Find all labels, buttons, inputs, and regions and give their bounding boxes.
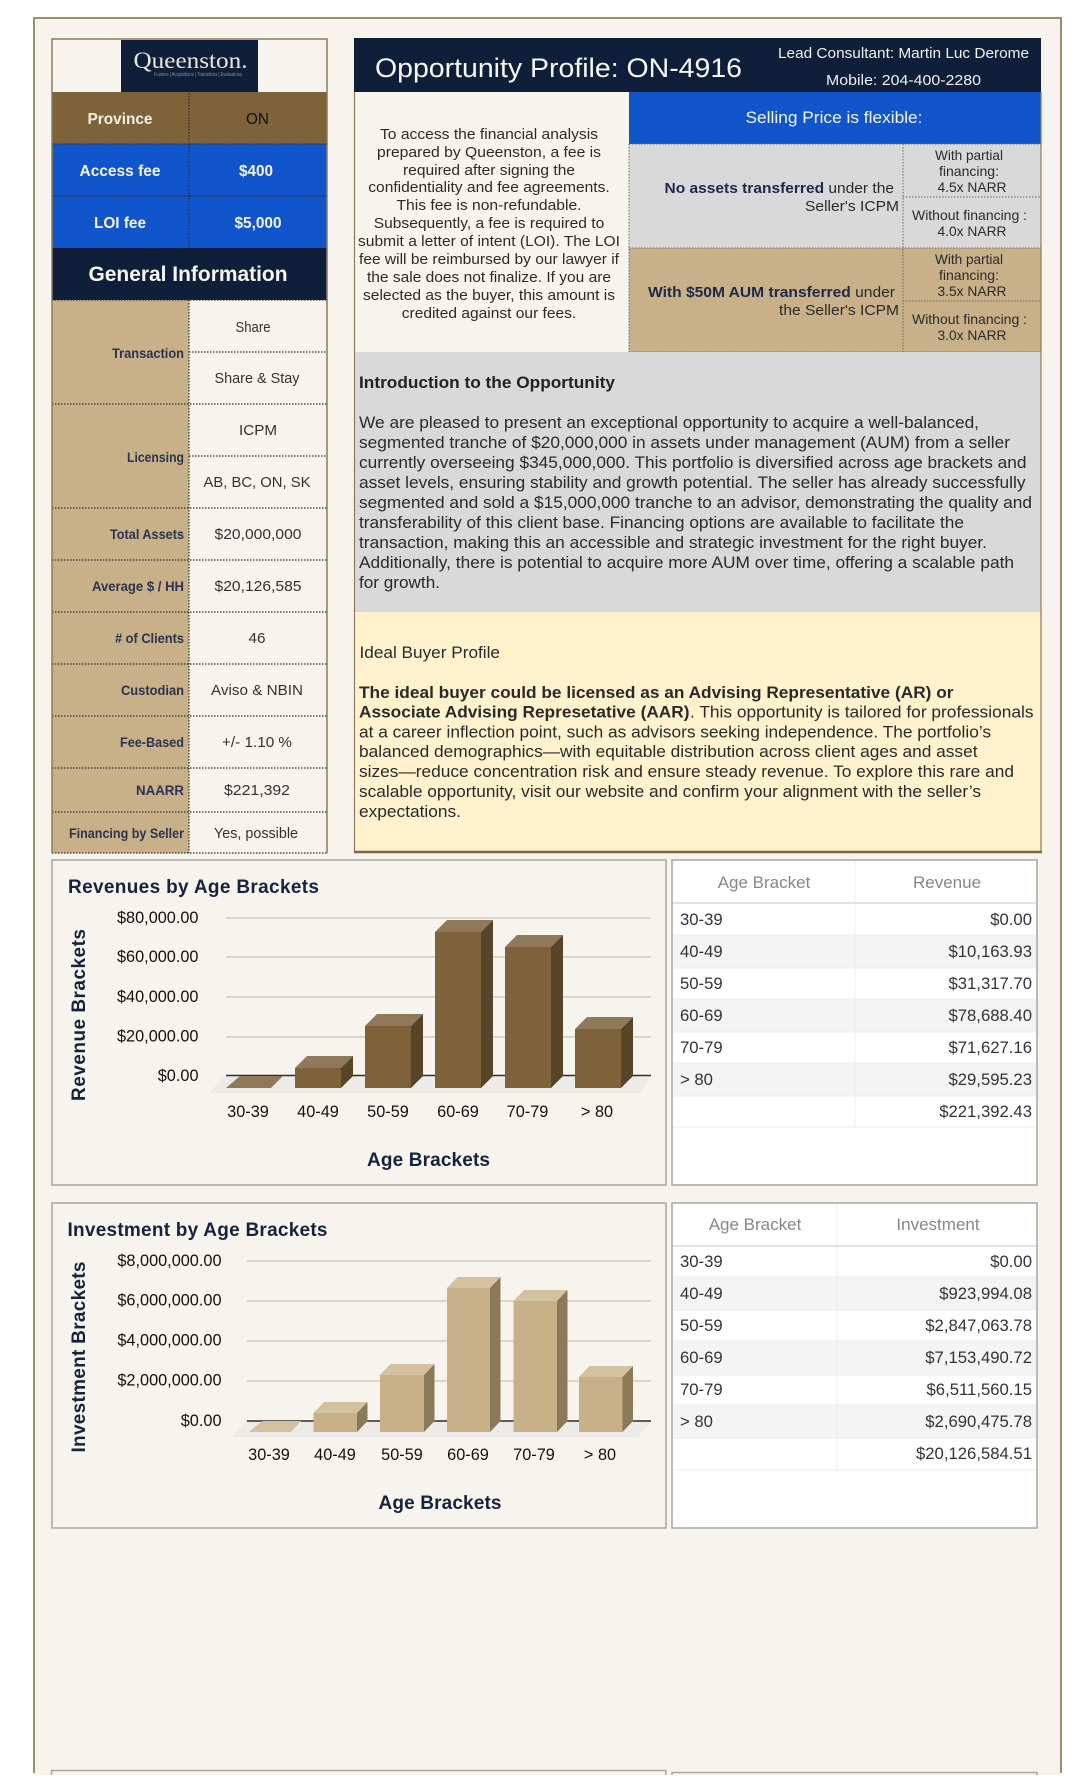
row labels: [69, 346, 185, 841]
table: revenue by age bracket: $0.00: [990, 910, 1032, 929]
row labels: # of Clients: [115, 631, 184, 646]
x axis labels: 70-79: [513, 1446, 555, 1464]
pricing: no assets transferred: 4.0x NARR: [938, 223, 1006, 239]
table: investment by age bracket: 40-49: [680, 1284, 723, 1303]
text block: introduction: currently overseeing $345,000,000. This portfolio is diversified across age brackets and: [359, 454, 1026, 472]
row: province: [52, 92, 327, 144]
x axis labels: 50-59: [381, 1446, 423, 1464]
text block: fee explanation: submit a letter of intent (LOI). The LOI: [358, 233, 620, 250]
text block: ideal buyer profile: at a career inflection point, such as advisors seeking independence. The portfolio’s: [359, 724, 991, 742]
pricing: no assets transferred: Without financing :: [912, 207, 1027, 223]
y axis labels: $80,000.00: [117, 909, 198, 927]
heading: general information: [52, 248, 327, 300]
x axis labels: 30-39: [227, 1103, 269, 1121]
row values: +/- 1.10 %: [222, 734, 292, 751]
row labels: Custodian: [121, 683, 184, 698]
text block: ideal buyer profile: The ideal buyer could be licensed as an Advising Representative (AR) or: [359, 684, 954, 702]
row: access fee: $400: [239, 163, 273, 180]
y axis labels: [117, 909, 198, 1085]
text block: introduction: Additionally, there is potential to acquire more AUM over time, offering a scalable path: [359, 554, 1014, 572]
y axis title: Revenue Brackets: [69, 929, 90, 1101]
table: revenue by age bracket: $31,317.70: [948, 974, 1032, 993]
table: revenue by age bracket: > 80: [680, 1070, 713, 1089]
header: opportunity profile: Opportunity Profile: ON-4916: [375, 53, 742, 83]
text block: fee explanation: This fee is non-refundable.: [396, 197, 582, 214]
y axis labels: $4,000,000.00: [117, 1332, 222, 1350]
pricing: with $50M AUM transferred: 3.0x NARR: [938, 327, 1006, 343]
row values: 46: [248, 630, 266, 647]
table: investment by age bracket: $2,690,475.78: [925, 1412, 1032, 1431]
x axis labels: 40-49: [297, 1103, 339, 1121]
y axis labels: $6,000,000.00: [117, 1292, 222, 1310]
table: revenue by age bracket: Age Bracket: [718, 873, 811, 892]
x axis labels: > 80: [584, 1446, 616, 1464]
pricing: with $50M AUM transferred: 3.5x NARR: [938, 283, 1006, 299]
pricing: no assets transferred: With partial: [935, 147, 1003, 163]
table: investment by age bracket: $6,511,560.15: [927, 1380, 1032, 1399]
table: investment by age bracket: $0.00: [990, 1252, 1032, 1271]
text block: introduction: for growth.: [359, 574, 440, 592]
header: opportunity profile: Mobile: 204-400-2280: [826, 72, 981, 89]
text block: ideal buyer profile: sizes—reduce concentration risk and ensure steady revenue. To explore this rare and: [359, 763, 1014, 781]
logo: Queenston: Queenston.: [134, 48, 248, 74]
text block: ideal buyer profile: Associate Advising Represetative (AAR): [359, 704, 690, 722]
table: revenue by age bracket: $221,392.43: [939, 1102, 1032, 1121]
text block: ideal buyer profile: Ideal Buyer Profile: [360, 644, 500, 662]
x axis labels: 60-69: [447, 1446, 489, 1464]
x axis labels: [248, 1446, 616, 1464]
table: revenue by age bracket: $10,163.93: [948, 942, 1032, 961]
text block: fee explanation: Subsequently, a fee is required to: [374, 215, 604, 232]
text block: fee explanation: [354, 92, 629, 352]
row: LOI fee: [52, 196, 327, 248]
table: investment by age bracket: Investment: [896, 1215, 980, 1234]
heading: general information: General Information: [88, 262, 288, 286]
row: access fee: Access fee: [80, 163, 161, 180]
table: revenue by age bracket: 50-59: [680, 974, 723, 993]
row values: Aviso & NBIN: [211, 682, 303, 699]
panel: left summary column: [52, 39, 327, 853]
row labels: Financing by Seller: [69, 826, 185, 841]
table: revenue by age bracket: Revenue: [913, 873, 981, 892]
table: revenue by age bracket: [672, 860, 1037, 1185]
text block: fee explanation: credited against our fees.: [402, 305, 576, 322]
table: investment by age bracket: Age Bracket: [709, 1215, 802, 1234]
table: investment by age bracket: [672, 1203, 1037, 1528]
banner: selling price: Selling Price is flexible:: [746, 109, 922, 127]
row labels: Licensing: [127, 450, 184, 465]
row values: Yes, possible: [214, 825, 298, 842]
table: revenue by age bracket: 70-79: [680, 1038, 723, 1057]
x axis title: Age Brackets: [367, 1150, 490, 1171]
text block: ideal buyer profile: balanced demographics—with equitable distribution across client ages and asset: [359, 743, 978, 761]
text block: fee explanation: the sale does not finalize. If you are: [367, 269, 611, 286]
panel: revenues chart: [52, 860, 666, 1185]
pricing: with $50M AUM transferred: the Seller's ICPM: [779, 302, 899, 319]
table: investment by age bracket: 50-59: [680, 1316, 723, 1335]
y axis labels: $8,000,000.00: [117, 1252, 222, 1270]
banner: selling price: [629, 92, 1041, 144]
table: investment by age bracket: 70-79: [680, 1380, 723, 1399]
row: province: ON: [246, 111, 269, 128]
text block: introduction: segmented tranche of $20,000,000 in assets under management (AUM) from a seller: [359, 434, 1011, 452]
y axis labels: $0.00: [158, 1067, 198, 1085]
pricing: no assets transferred: [629, 144, 1041, 248]
row labels: Total Assets: [110, 527, 184, 542]
text block: introduction: segmented and sold a $15,000,000 tranche to an advisor, demonstrating the quality and: [359, 494, 1032, 512]
y axis labels: $40,000.00: [117, 988, 198, 1006]
table: revenue by age bracket: 40-49: [680, 942, 723, 961]
y axis labels: [117, 1252, 222, 1430]
text block: introduction: Introduction to the Opportunity: [359, 374, 616, 392]
panel: investment chart: [52, 1203, 666, 1528]
text block: fee explanation: selected as the buyer, this amount is: [363, 287, 615, 304]
table: investment by age bracket: 30-39: [680, 1252, 723, 1271]
x axis labels: [227, 1103, 613, 1121]
table: revenue by age bracket: $71,627.16: [948, 1038, 1032, 1057]
table: investment by age bracket: > 80: [680, 1412, 713, 1431]
table: revenue by age bracket: 60-69: [680, 1006, 723, 1025]
text block: ideal buyer profile: [354, 612, 1041, 852]
text block: introduction: We are pleased to present an exceptional opportunity to acquire a well-balanced,: [359, 414, 979, 432]
text block: fee explanation: confidentiality and fee agreements.: [368, 179, 610, 196]
row values: ICPM: [239, 422, 277, 439]
y axis labels: $0.00: [181, 1412, 222, 1430]
row: LOI fee: $5,000: [234, 215, 282, 232]
x axis title: Age Brackets: [378, 1493, 502, 1514]
text block: fee explanation: prepared by Queenston, a fee is: [377, 144, 601, 161]
pricing: no assets transferred: financing:: [939, 163, 999, 179]
pricing: with $50M AUM transferred: [629, 248, 1041, 352]
text block: ideal buyer profile: expectations.: [359, 803, 461, 821]
label column background: [52, 300, 189, 853]
table: investment by age bracket: 60-69: [680, 1348, 723, 1367]
text block: fee explanation: To access the financial analysis: [380, 126, 598, 143]
row labels: Fee-Based: [120, 735, 184, 750]
table: investment by age bracket: $923,994.08: [939, 1284, 1032, 1303]
row values: [204, 319, 310, 842]
bar chart: revenues: [209, 918, 651, 1093]
text block: introduction: transferability of this client base. Financing options are available to facilitate the: [359, 514, 964, 532]
logo: Queenston: Fusions | Acquisitions | Transitions | Evaluations: [154, 72, 242, 78]
row values: $20,000,000: [214, 526, 302, 543]
pricing: no assets transferred: Seller's ICPM: [805, 198, 899, 215]
y axis title: Investment Brackets: [69, 1262, 90, 1452]
y axis labels: $20,000.00: [117, 1028, 198, 1046]
cut-off panel tops at page bottom: [52, 1770, 1037, 1775]
x axis labels: 40-49: [314, 1446, 356, 1464]
row labels: Transaction: [112, 346, 184, 361]
table: revenue by age bracket: $29,595.23: [948, 1070, 1032, 1089]
bar chart: investment: [232, 1261, 651, 1437]
x axis labels: 30-39: [248, 1446, 290, 1464]
x axis labels: 50-59: [367, 1103, 409, 1121]
panel: right column: [354, 38, 1042, 852]
table: investment by age bracket: $7,153,490.72: [925, 1348, 1032, 1367]
y axis labels: $2,000,000.00: [117, 1372, 222, 1390]
chart title: Revenues by Age Brackets: [68, 877, 319, 898]
pricing: no assets transferred: 4.5x NARR: [938, 179, 1006, 195]
row: access fee: [52, 144, 327, 196]
pricing: no assets transferred: No assets transferred under the: [664, 180, 894, 197]
x axis labels: 70-79: [507, 1103, 548, 1121]
table: revenue by age bracket: 30-39: [680, 910, 723, 929]
table: investment by age bracket: $20,126,584.51: [916, 1444, 1032, 1463]
chart title: Investment by Age Brackets: [68, 1220, 328, 1241]
row values: $20,126,585: [214, 578, 302, 595]
header: opportunity profile: [354, 38, 1041, 92]
text block: introduction: asset levels, ensuring stability and growth potential. The seller has already successfully: [359, 474, 1026, 492]
table: investment by age bracket: $2,847,063.78: [925, 1316, 1032, 1335]
header: opportunity profile: Lead Consultant: Martin Luc Derome: [778, 45, 1029, 62]
pricing: with $50M AUM transferred: financing:: [939, 267, 999, 283]
pricing: with $50M AUM transferred: With partial: [935, 251, 1003, 267]
logo: Queenston: [121, 40, 258, 92]
row values: AB, BC, ON, SK: [204, 474, 310, 491]
row values: Share: [236, 319, 270, 336]
text block: ideal buyer profile: scalable opportunity, visit our website and confirm your alignment with the seller’s: [359, 783, 981, 801]
row labels: NAARR: [136, 783, 184, 798]
row values: Share & Stay: [214, 370, 300, 387]
text block: introduction: transaction, making this an accessible and strategic investment for the right buyer.: [359, 534, 987, 552]
y axis labels: $60,000.00: [117, 948, 198, 966]
text block: fee explanation: required after signing the: [403, 162, 575, 179]
row: province: Province: [88, 111, 153, 128]
pricing: with $50M AUM transferred: With $50M AUM transferred under: [648, 284, 895, 301]
text block: fee explanation: fee will be reimbursed by our lawyer if: [359, 251, 620, 268]
x axis labels: 60-69: [437, 1103, 479, 1121]
pricing: with $50M AUM transferred: Without financing :: [912, 311, 1027, 327]
text block: ideal buyer profile: . This opportunity is tailored for professionals: [690, 704, 1034, 722]
row: LOI fee: LOI fee: [94, 215, 146, 232]
row labels: Average $ / HH: [92, 579, 184, 594]
text block: introduction: [354, 352, 1041, 612]
x axis labels: > 80: [581, 1103, 613, 1121]
row values: $221,392: [224, 782, 290, 799]
table: revenue by age bracket: $78,688.40: [948, 1006, 1032, 1025]
